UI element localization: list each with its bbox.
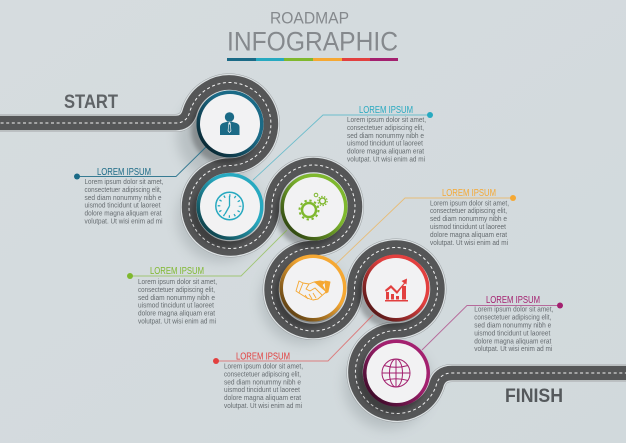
text block 1: uismod tincidunt ut laoreet bbox=[84, 201, 161, 210]
icon: rising chart bbox=[385, 278, 408, 302]
text block 5 bbox=[224, 352, 303, 410]
text block 5: sed diam nonummy nibh e bbox=[224, 377, 301, 386]
text block 6: uismod tincidunt ut laoreet bbox=[474, 328, 551, 337]
text block 4: Lorem ipsum dolor sit amet, bbox=[138, 277, 217, 286]
node 4: handshake bbox=[280, 254, 346, 322]
icon: businessman bbox=[220, 112, 240, 135]
text block 6: consectetuer adipiscing elit, bbox=[474, 313, 551, 322]
text block 4: uismod tincidunt ut laoreet bbox=[138, 301, 215, 310]
text block 6: sed diam nonummy nibh e bbox=[474, 320, 551, 330]
ground shadows bbox=[177, 92, 432, 429]
text block 2: volutpat. Ut wisi enim ad mi bbox=[347, 154, 425, 164]
text block 6: volutpat. Ut wisi enim ad mi bbox=[474, 344, 553, 353]
text block 1: volutpat. Ut wisi enim ad mi bbox=[84, 216, 163, 226]
text block 5: consectetuer adipiscing elit, bbox=[224, 369, 301, 378]
text block 6: dolore magna aliquam erat bbox=[474, 336, 552, 345]
start label: START bbox=[64, 91, 118, 113]
text block 2: sed diam nonummy nibh e bbox=[347, 131, 424, 140]
text block 6 bbox=[474, 295, 553, 353]
text block 3: LOREM IPSUM bbox=[442, 188, 496, 199]
text block 1: LOREM IPSUM bbox=[97, 167, 151, 178]
text block 3: Lorem ipsum dolor sit amet, bbox=[430, 198, 509, 207]
node 1: person bbox=[196, 90, 264, 158]
icon: globe bbox=[382, 359, 410, 387]
text block 3: volutpat. Ut wisi enim ad mi bbox=[430, 238, 508, 247]
icon: clock bbox=[216, 192, 243, 220]
icon: handshake bbox=[296, 281, 330, 300]
text block 2: uismod tincidunt ut laoreet bbox=[347, 139, 424, 148]
text block 5: Lorem ipsum dolor sit amet, bbox=[224, 362, 303, 370]
text block 6: LOREM IPSUM bbox=[486, 295, 540, 306]
text block 3: uismod tincidunt ut laoreet bbox=[430, 222, 507, 231]
text block 6: Lorem ipsum dolor sit amet, bbox=[474, 305, 553, 314]
text block 4: consectetuer adipiscing elit, bbox=[138, 285, 215, 294]
finish label: FINISH bbox=[505, 385, 563, 407]
text block 2: LOREM IPSUM bbox=[359, 105, 413, 116]
title: ROADMAP bbox=[270, 10, 349, 28]
title: INFOGRAPHIC bbox=[227, 26, 398, 56]
text block 2: dolore magna aliquam erat bbox=[347, 147, 425, 156]
node shadows on road bbox=[191, 96, 426, 413]
text block 5: dolore magna aliquam erat bbox=[224, 393, 302, 402]
text block 2: consectetuer adipiscing elit, bbox=[347, 123, 424, 132]
text block 1: consectetuer adipiscing elit, bbox=[84, 185, 162, 194]
text block 3: dolore magna aliquam erat bbox=[430, 230, 508, 239]
text block 4: sed diam nonummy nibh e bbox=[138, 293, 215, 302]
text block 3: consectetuer adipiscing elit, bbox=[430, 206, 507, 215]
node 2: clock bbox=[196, 173, 264, 240]
text block 2 bbox=[347, 105, 426, 164]
leader lines bbox=[77, 115, 560, 361]
icon: gears bbox=[300, 193, 327, 220]
title bbox=[227, 10, 398, 56]
text block 5: LOREM IPSUM bbox=[236, 352, 290, 362]
text block 4: LOREM IPSUM bbox=[150, 266, 204, 277]
text block 1 bbox=[84, 167, 164, 226]
text block 2: Lorem ipsum dolor sit amet, bbox=[347, 115, 426, 124]
text block 4: volutpat. Ut wisi enim ad mi bbox=[138, 316, 216, 326]
text block 1: Lorem ipsum dolor sit amet, bbox=[84, 177, 164, 186]
text block 5: uismod tincidunt ut laoreet bbox=[224, 385, 301, 394]
text block 1: dolore magna aliquam erat bbox=[84, 209, 162, 218]
leader dots bbox=[74, 112, 563, 364]
road bbox=[0, 83, 626, 413]
text block 4 bbox=[138, 266, 217, 326]
text block 5: volutpat. Ut wisi enim ad mi bbox=[224, 401, 302, 410]
text block 3: sed diam nonummy nibh e bbox=[430, 214, 507, 223]
node 3: gears bbox=[280, 174, 348, 240]
colour bar bbox=[227, 58, 398, 61]
node 6: globe bbox=[363, 340, 430, 406]
text block 1: sed diam nonummy nibh e bbox=[84, 193, 162, 202]
text block 4: dolore magna aliquam erat bbox=[138, 309, 216, 318]
text block 3 bbox=[430, 188, 509, 247]
node 5: chart bbox=[362, 254, 430, 322]
